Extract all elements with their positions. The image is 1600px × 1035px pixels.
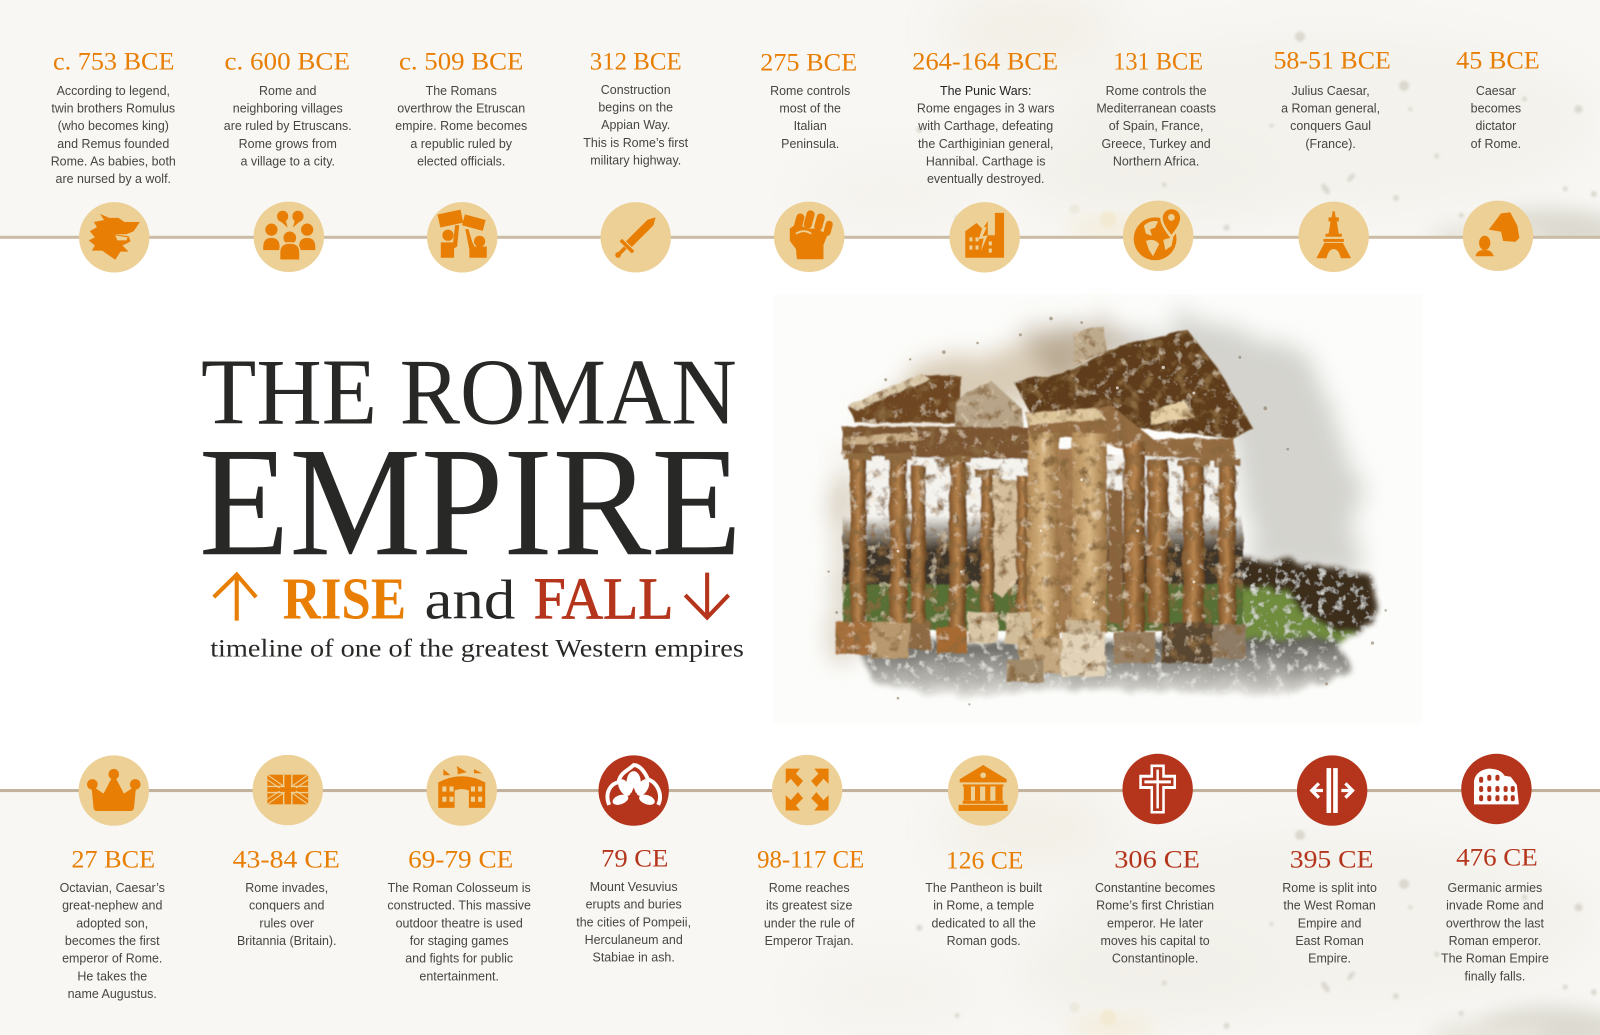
description: finally falls. (1464, 969, 1525, 983)
description: the cities of Pompeii, (576, 915, 691, 929)
date: c. 509 BCE (399, 46, 523, 75)
event: 312 BCE (583, 46, 689, 273)
description: Rome grows from (239, 137, 337, 151)
description: Peninsula. (781, 137, 839, 151)
description: The Pantheon is built (925, 881, 1043, 895)
description: According to legend, (57, 84, 170, 98)
description: military highway. (590, 154, 681, 168)
description: Emperor Trajan. (765, 934, 854, 948)
description: begins on the (598, 101, 673, 115)
description: Appian Way. (601, 118, 670, 132)
description: in Rome, a temple (933, 899, 1034, 913)
front columns (1028, 433, 1059, 639)
event: c. 600 BCE (224, 46, 352, 272)
event: 275 BCE (760, 47, 857, 272)
description: of Spain, France, (1109, 119, 1203, 133)
description: erupts and buries (586, 898, 682, 912)
description: Rome and (259, 84, 317, 98)
heading: EMPIRE: EMPIRE (199, 415, 742, 588)
description: He takes the (77, 969, 147, 983)
description: becomes (1471, 102, 1521, 116)
description: under the rule of (764, 916, 855, 930)
description: name Augustus. (68, 987, 157, 1001)
description: adopted son, (76, 916, 148, 930)
description: and fights for public (405, 952, 513, 966)
description: Roman gods. (947, 934, 1021, 948)
description: are ruled by Etruscans. (224, 119, 352, 133)
roofs (848, 376, 960, 423)
title block (199, 341, 744, 662)
description: Britannia (Britain). (237, 934, 337, 948)
icon: ruined factory (949, 202, 1020, 273)
icon: raised fist (774, 202, 844, 272)
event: 58-51 BCE (1273, 45, 1391, 272)
description: a village to a city. (241, 155, 335, 169)
paint splatter (827, 317, 1387, 705)
description: overthrow the Etruscan (397, 102, 525, 116)
description: Hannibal. Carthage is (926, 155, 1046, 169)
capitals (845, 453, 1241, 477)
icon: Pantheon temple (948, 755, 1018, 826)
top timeline line (0, 236, 1600, 239)
description: This is Rome’s first (583, 136, 689, 150)
description: Northern Africa. (1113, 155, 1199, 169)
date: 43-84 CE (233, 845, 340, 874)
description: Mount Vesuvius (590, 880, 678, 894)
sky wash (829, 322, 1362, 663)
date: 126 CE (946, 846, 1023, 875)
heading: THE ROMAN: THE ROMAN (201, 341, 737, 445)
description: (France). (1305, 137, 1356, 151)
subheading: and: and (424, 570, 515, 632)
description: and Remus founded (57, 137, 169, 151)
description: Constantine becomes (1095, 881, 1215, 895)
date: 131 BCE (1113, 46, 1203, 75)
description: of Rome. (1471, 137, 1521, 151)
icon: Christian cross (1122, 754, 1193, 824)
event: 98-117 CE (757, 755, 864, 948)
description: Greece, Turkey and (1102, 137, 1211, 151)
description: emperor. He later (1107, 916, 1203, 930)
icon: group of people (254, 202, 324, 272)
date: 476 CE (1456, 843, 1538, 872)
description: for staging games (410, 934, 509, 948)
date: 79 CE (601, 844, 668, 873)
subheading: RISE: RISE (283, 566, 406, 632)
date: 27 BCE (71, 845, 155, 874)
description: Constantinople. (1112, 952, 1198, 966)
arrow: rise (214, 575, 256, 621)
description: Empire. (1308, 952, 1351, 966)
description: Rome engages in 3 wars (917, 102, 1054, 116)
description: Mediterranean coasts (1096, 102, 1216, 116)
arrow: fall (685, 573, 729, 618)
description: The Punic Wars: (940, 84, 1031, 98)
subheading: FALL: FALL (534, 566, 673, 632)
event: 476 CE (1441, 754, 1549, 983)
description: conquers Gaul (1290, 119, 1371, 133)
icon: wolf head (79, 202, 149, 273)
description: dictator (1476, 119, 1516, 133)
icon: protesters with signs (427, 202, 497, 273)
event: 306 CE (1095, 754, 1215, 966)
icon: globe with map pin (1123, 201, 1193, 271)
event: 79 CE (576, 755, 691, 965)
date: 312 BCE (590, 46, 682, 75)
description: outdoor theatre is used (396, 916, 523, 930)
description: the Carthiginian general, (918, 137, 1053, 151)
description: Italian (794, 119, 827, 133)
description: The Romans (426, 84, 497, 98)
description: elected officials. (417, 155, 505, 169)
description: with Carthage, defeating (917, 119, 1053, 133)
description: Herculaneum and (585, 933, 683, 947)
description: Rome. As babies, both (51, 155, 176, 169)
description: (who becomes king) (58, 119, 169, 133)
description: Rome controls the (1106, 84, 1207, 98)
description: great-nephew and (62, 899, 162, 913)
description: Roman emperor. (1449, 934, 1541, 948)
soft background: hedge and ground (857, 556, 1378, 698)
date: 69-79 CE (408, 845, 513, 874)
event: 131 BCE (1096, 46, 1216, 271)
grass (843, 584, 1243, 631)
icon: amphitheatre (427, 755, 497, 826)
icon: sword (601, 202, 671, 273)
description: Caesar (1476, 84, 1516, 98)
bottom timeline line (0, 789, 1600, 792)
description: Julius Caesar, (1292, 84, 1370, 98)
distant trees (843, 515, 1243, 592)
description: overthrow the last (1446, 916, 1545, 930)
description: becomes the first (65, 934, 160, 948)
description: Rome’s first Christian (1096, 899, 1214, 913)
description: The Roman Empire (1441, 952, 1549, 966)
description: entertainment. (419, 969, 499, 983)
column bases (836, 622, 871, 654)
description: emperor of Rome. (62, 952, 162, 966)
description: are nursed by a wolf. (56, 172, 171, 186)
description: East Roman (1295, 934, 1364, 948)
description: a Roman general, (1281, 102, 1380, 116)
description: Germanic armies (1448, 881, 1542, 895)
description: Empire and (1298, 916, 1361, 930)
icon: Colosseum ruin (1461, 754, 1532, 824)
description: The Roman Colosseum is (388, 881, 531, 895)
description: neighboring villages (233, 102, 343, 116)
date: c. 600 BCE (224, 46, 350, 75)
date: 264-164 BCE (912, 46, 1058, 75)
date: 306 CE (1114, 845, 1200, 874)
icon: Union Jack flag (253, 755, 323, 825)
description: invade Rome and (1446, 899, 1544, 913)
event: 45 BCE (1456, 45, 1540, 271)
description: rules over (259, 916, 314, 930)
description: moves his capital to (1100, 934, 1210, 948)
date: 45 BCE (1456, 45, 1540, 74)
event: 126 CE (925, 755, 1043, 948)
icon: crown (79, 755, 149, 826)
description: eventually destroyed. (927, 172, 1044, 186)
event: 264-164 BCE (912, 46, 1058, 273)
painted temple (836, 327, 1253, 682)
top paper band (0, 0, 1600, 253)
description: conquers and (249, 899, 324, 913)
icon: Eiffel Tower (1298, 202, 1369, 272)
description: Octavian, Caesar’s (60, 881, 165, 895)
date: 395 CE (1290, 845, 1373, 874)
date: 98-117 CE (757, 845, 864, 874)
event: 69-79 CE (387, 755, 531, 983)
description: constructed. This massive (387, 899, 531, 913)
description: most of the (779, 102, 841, 116)
description: Rome reaches (769, 881, 850, 895)
icon: hand crowning a head (1463, 201, 1533, 271)
description: Rome invades, (245, 881, 328, 895)
event: c. 509 BCE (395, 46, 527, 273)
description: its greatest size (766, 899, 852, 913)
date: c. 753 BCE (53, 46, 174, 75)
event: 43-84 CE (233, 755, 340, 948)
event: 395 CE (1282, 755, 1377, 966)
description: Stabiae in ash. (593, 951, 675, 965)
event: 27 BCE (60, 755, 165, 1001)
back columns (850, 455, 866, 624)
bottom paper band (0, 788, 1600, 1035)
description: Construction (601, 83, 671, 97)
date: 275 BCE (760, 47, 857, 76)
icon: split arrows (1297, 755, 1367, 826)
tagline: timeline of one of the greatest Western empires (210, 633, 744, 662)
sky between columns (852, 455, 1238, 537)
icon: expanding arrows (772, 755, 842, 825)
entablatures (842, 427, 1028, 459)
date: 58-51 BCE (1273, 45, 1391, 74)
description: twin brothers Romulus (51, 102, 175, 116)
image: watercolor Roman temple ruin (773, 294, 1422, 724)
description: empire. Rome becomes (395, 119, 527, 133)
event: c. 753 BCE (51, 46, 176, 273)
icon: erupting volcano (598, 755, 669, 826)
description: dedicated to all the (931, 916, 1036, 930)
description: Rome is split into (1282, 881, 1377, 895)
description: Rome controls (770, 84, 850, 98)
description: a republic ruled by (410, 137, 513, 151)
description: the West Roman (1283, 899, 1376, 913)
